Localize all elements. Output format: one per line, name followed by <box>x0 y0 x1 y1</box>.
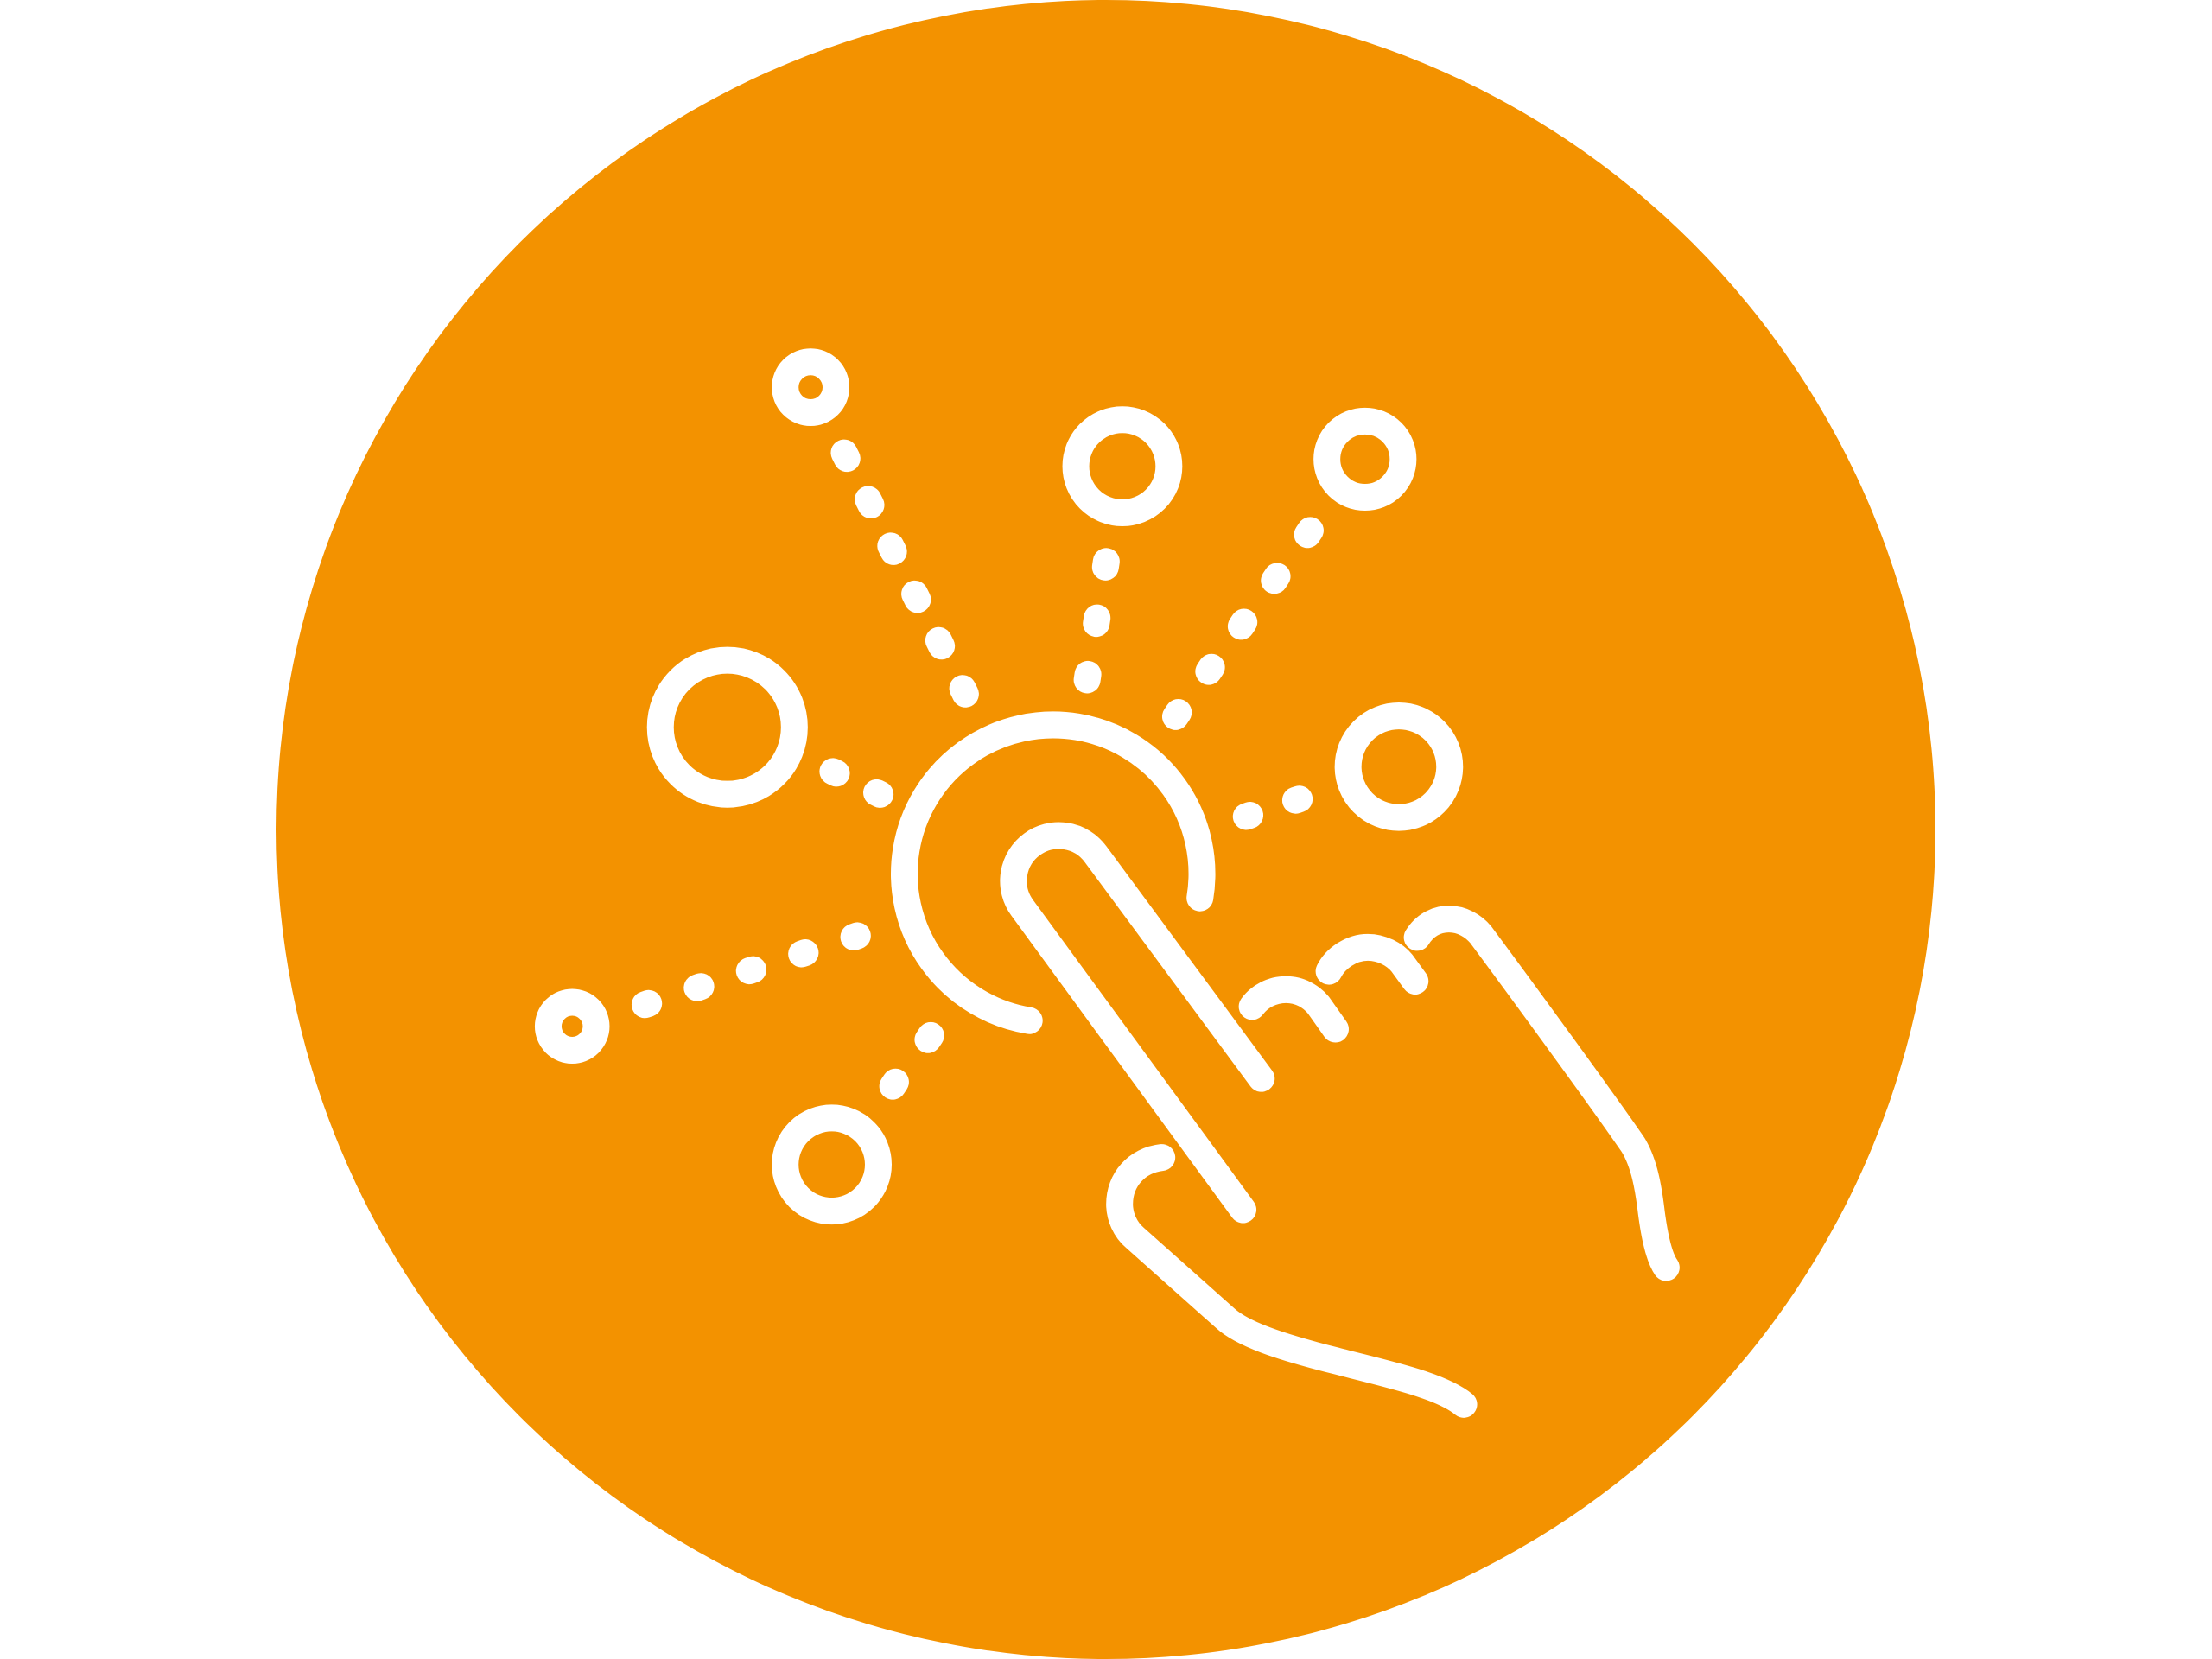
hand: index finger <box>1014 836 1262 1210</box>
dotted ray: to left large ring <box>833 772 880 794</box>
icon: touch gesture <box>548 362 1666 1404</box>
dotted ray: to right ring <box>1246 799 1300 817</box>
ring: left large <box>660 660 794 794</box>
ring: right <box>1348 716 1450 817</box>
touch ripple arc <box>905 725 1202 1020</box>
hand: thumb <box>1120 1158 1464 1404</box>
dotted ray: to top left ring <box>844 453 965 694</box>
ring: lower left small <box>548 1002 596 1051</box>
ring: top left small <box>785 362 836 413</box>
ring: top middle <box>1076 420 1169 512</box>
dotted ray: to bottom ring <box>893 1035 931 1086</box>
dotted ray: to top right ring <box>1175 531 1310 716</box>
ring: top right <box>1327 421 1403 498</box>
ring: bottom <box>785 1118 878 1211</box>
hand: middle finger knuckle <box>1252 989 1335 1029</box>
hand: back of hand <box>1417 919 1666 1268</box>
hand: ring finger knuckle <box>1329 947 1415 982</box>
dotted ray: to lower left small ring <box>645 936 857 1005</box>
orange background circle <box>276 0 1936 1659</box>
dotted ray: to top middle ring <box>1087 562 1106 680</box>
